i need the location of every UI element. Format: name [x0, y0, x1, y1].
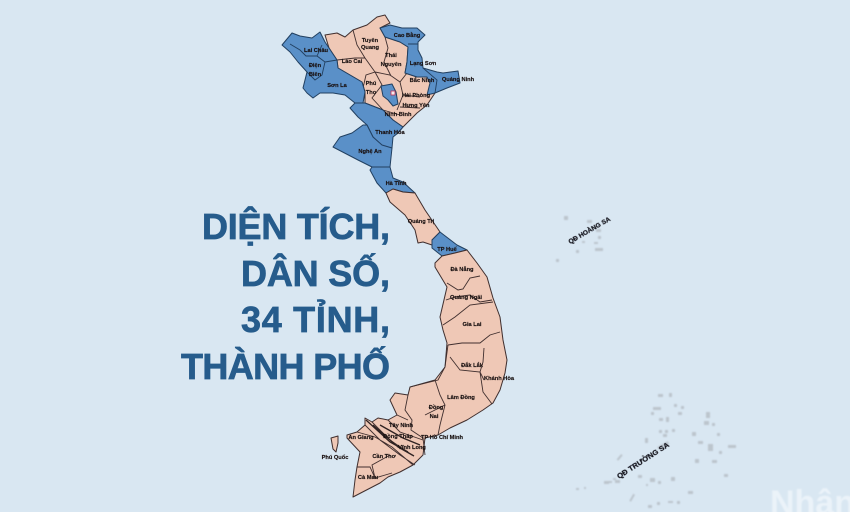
province labels: Nai — [430, 414, 439, 420]
icon: Hà Nội marker — [391, 91, 395, 95]
province labels: Gia Lai — [463, 322, 482, 328]
province labels: Nghệ An — [358, 149, 382, 155]
title: DIỆN TÍCH, — [202, 205, 390, 247]
province labels: Đồng Tháp — [383, 434, 413, 440]
title — [181, 205, 390, 387]
region: Thanh Hóa — [350, 103, 403, 148]
region: Hà Nội area — [381, 84, 398, 106]
province labels: Điện — [309, 63, 322, 69]
province labels: TP Huế — [437, 246, 458, 253]
province labels: Lào Cai — [342, 59, 363, 65]
province labels: Cà Mau — [358, 475, 379, 481]
province labels: Biên — [309, 72, 322, 78]
region: TP Huế — [432, 232, 467, 256]
province labels: Khánh Hòa — [484, 376, 515, 382]
Trường Sa archipelago — [576, 393, 736, 508]
region: Quảng Trị — [386, 189, 440, 245]
province labels: An Giang — [348, 435, 374, 441]
province labels — [304, 32, 515, 481]
title: DÂN SỐ, — [241, 252, 390, 294]
province labels: Tây Ninh — [389, 423, 414, 429]
province labels: Sơn La — [327, 83, 348, 89]
province labels: Hưng Yên — [402, 103, 430, 109]
province labels: Đồng — [429, 405, 444, 411]
province labels: Thọ — [366, 90, 377, 96]
province labels: Phú Quốc — [322, 454, 348, 461]
province labels: Cao Bằng — [394, 32, 421, 39]
region: Hà Tĩnh — [370, 167, 415, 193]
region: Lai Châu, Điện Biên, Sơn La — [282, 32, 365, 103]
label: Hoàng Sa: QĐ HOÀNG SA — [566, 214, 612, 246]
province labels: Lai Châu — [304, 48, 329, 54]
province labels: Hà Tĩnh — [386, 181, 407, 187]
region: Nghệ An — [333, 125, 392, 167]
province labels: Lạng Sơn — [410, 61, 437, 67]
title: 34 TỈNH, — [241, 299, 390, 340]
province labels: Vĩnh Long — [398, 445, 426, 451]
province labels: Phú — [366, 81, 377, 87]
map of Vietnam — [282, 15, 515, 497]
region: Đảo Phú Quốc — [331, 436, 338, 452]
province labels: Quảng Trị — [408, 219, 435, 225]
province labels: Ninh Bình — [385, 112, 412, 118]
province labels: Hải Phòng — [402, 93, 431, 99]
province labels: Thái — [385, 53, 397, 59]
province labels: Đắk Lắk — [461, 362, 484, 369]
label: Trường Sa: QĐ TRƯỜNG SA — [615, 440, 671, 481]
province labels: TP Hồ Chí Minh — [421, 435, 463, 441]
province labels: Quảng Ngãi — [450, 295, 482, 301]
province labels: Quang — [361, 45, 380, 51]
province labels: Quảng Ninh — [442, 77, 475, 83]
Hoàng Sa archipelago — [556, 214, 612, 262]
province labels: Lâm Đồng — [447, 395, 475, 401]
province labels: Cần Thơ — [372, 454, 397, 460]
title: THÀNH PHỐ — [181, 345, 390, 387]
province labels: Bắc Ninh — [410, 77, 435, 84]
province labels: Đà Nẵng — [450, 266, 474, 273]
region: central and southern pink provinces — [347, 250, 507, 497]
region: Cao Bằng, Lạng Sơn, Quảng Ninh — [380, 25, 460, 95]
region: northern pink provinces — [325, 15, 435, 127]
province labels: Nguyên — [381, 62, 402, 68]
province labels: Tuyên — [362, 38, 379, 44]
province labels: Thanh Hóa — [375, 130, 406, 136]
